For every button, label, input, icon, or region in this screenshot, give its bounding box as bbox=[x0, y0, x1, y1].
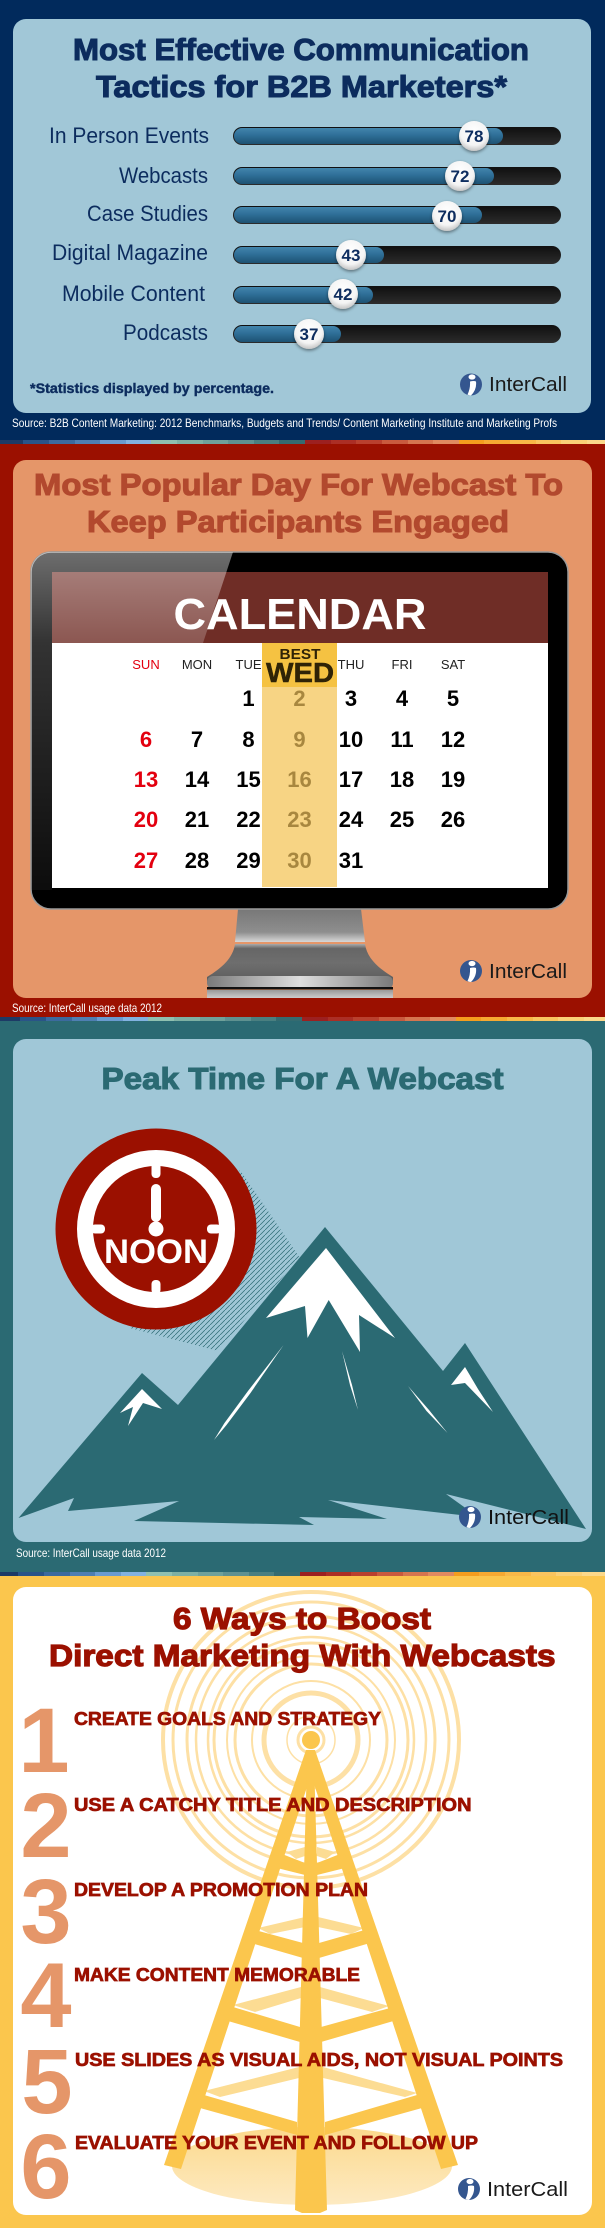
logo: intercall: InterCall bbox=[489, 374, 567, 396]
logo: intercall bbox=[460, 960, 567, 983]
best wednesday column: BEST bbox=[280, 646, 320, 663]
logo: intercall: InterCall bbox=[487, 2179, 568, 2201]
logo: intercall bbox=[460, 374, 567, 396]
calendar dates: 21 bbox=[185, 807, 209, 832]
tip 1: CREATE GOALS AND STRATEGY bbox=[74, 1709, 381, 1729]
row: podcasts 37: Podcasts bbox=[123, 320, 208, 345]
panel: most popular day bbox=[0, 444, 605, 1017]
calendar dates: 20 bbox=[134, 807, 158, 832]
tip 3 bbox=[20, 1861, 368, 1963]
calendar header bbox=[52, 572, 548, 643]
calendar dates: 1 bbox=[242, 686, 255, 711]
row: digital magazine 43 bbox=[52, 240, 561, 270]
row: webcasts 72 bbox=[119, 161, 561, 191]
list of six tips bbox=[18, 1690, 563, 2218]
calendar header: CALENDAR bbox=[174, 590, 426, 639]
row: in person events 78: 78 bbox=[465, 127, 483, 146]
calendar dates: 25 bbox=[390, 807, 414, 832]
heading: most effective communication tactics: Most Effective Communication bbox=[73, 32, 529, 67]
calendar dates: 29 bbox=[236, 848, 261, 873]
heading: most popular day for webcast: Keep Participants Engaged bbox=[87, 504, 509, 539]
calendar dates: 9 bbox=[293, 727, 306, 752]
calendar dates: 17 bbox=[339, 767, 363, 792]
tip 4: MAKE CONTENT MEMORABLE bbox=[74, 1965, 360, 1985]
row: case studies 70 bbox=[87, 201, 561, 231]
heading: most popular day for webcast: Most Popular Day For Webcast To bbox=[34, 467, 563, 502]
calendar dates: 15 bbox=[236, 767, 261, 792]
calendar dates: 19 bbox=[441, 767, 465, 792]
calendar dates: 6 bbox=[140, 727, 152, 752]
monitor stand bbox=[207, 909, 393, 998]
row: podcasts 37 bbox=[123, 319, 561, 349]
calendar dates: 5 bbox=[447, 686, 459, 711]
monitor with calendar bbox=[31, 552, 568, 909]
calendar dates: 13 bbox=[134, 767, 158, 792]
clock: noon bbox=[56, 1128, 256, 1330]
calendar dates: 18 bbox=[390, 767, 414, 792]
calendar dates: 28 bbox=[185, 848, 209, 873]
calendar dates: 24 bbox=[339, 807, 364, 832]
weekday labels: TUE bbox=[236, 657, 262, 672]
row: mobile content 42: 42 bbox=[334, 285, 352, 304]
source note: Source: InterCall usage data 2012 bbox=[12, 1001, 162, 1015]
logo: intercall: InterCall bbox=[489, 961, 567, 983]
heading: most effective communication tactics bbox=[73, 32, 529, 104]
logo: intercall bbox=[459, 1506, 569, 1529]
tip 3: 3 bbox=[20, 1861, 72, 1963]
calendar dates: 8 bbox=[242, 727, 255, 752]
tip 1: 1 bbox=[18, 1690, 70, 1792]
calendar dates: 27 bbox=[134, 848, 158, 873]
row: case studies 70: Case Studies bbox=[87, 201, 208, 226]
row: mobile content 42 bbox=[62, 279, 561, 309]
weekday labels: SAT bbox=[441, 657, 465, 672]
best wednesday column: WED bbox=[266, 657, 334, 688]
bar chart: tactic percentages bbox=[49, 121, 561, 349]
tip 2 bbox=[20, 1775, 472, 1877]
panel: peak time bbox=[0, 1021, 605, 1572]
tip 5: 5 bbox=[21, 2031, 73, 2133]
row: digital magazine 43: Digital Magazine bbox=[52, 240, 208, 265]
radio tower illustration bbox=[163, 1592, 459, 2213]
tip 4: 4 bbox=[20, 1945, 72, 2047]
row: podcasts 37: 37 bbox=[300, 325, 318, 344]
row: mobile content 42: Mobile Content bbox=[62, 281, 205, 306]
calendar dates: 11 bbox=[390, 727, 414, 752]
calendar dates: 7 bbox=[191, 727, 203, 752]
heading: most popular day for webcast bbox=[34, 467, 563, 539]
tip 2: 2 bbox=[20, 1775, 72, 1877]
calendar dates: 23 bbox=[287, 807, 312, 832]
footnote: *Statistics displayed by percentage. bbox=[30, 380, 274, 396]
tip 5 bbox=[21, 2031, 563, 2133]
tip 6: 6 bbox=[20, 2116, 72, 2218]
logo: intercall: InterCall bbox=[488, 1507, 569, 1529]
weekday labels: FRI bbox=[392, 657, 412, 672]
calendar dates: 14 bbox=[185, 767, 210, 792]
calendar dates: 4 bbox=[396, 686, 409, 711]
calendar dates bbox=[134, 686, 465, 873]
tip 4 bbox=[20, 1945, 360, 2047]
source note: Source: InterCall usage data 2012 bbox=[16, 1546, 166, 1560]
row: digital magazine 43: 43 bbox=[342, 246, 360, 265]
calendar dates: 16 bbox=[287, 767, 312, 792]
tip 6 bbox=[20, 2116, 478, 2218]
weekday labels: SUN bbox=[132, 657, 160, 672]
calendar dates: 2 bbox=[293, 686, 306, 711]
row: webcasts 72: Webcasts bbox=[119, 163, 208, 188]
row: case studies 70: 70 bbox=[438, 207, 456, 226]
tip 5: USE SLIDES AS VISUAL AIDS, NOT VISUAL POINTS bbox=[75, 2050, 563, 2070]
row: in person events 78: In Person Events bbox=[49, 123, 209, 148]
calendar dates: 31 bbox=[339, 848, 363, 873]
heading: most effective communication tactics: Tactics for B2B Marketers* bbox=[96, 69, 508, 104]
weekday labels: THU bbox=[338, 657, 364, 672]
calendar dates: 22 bbox=[236, 807, 261, 832]
row: in person events 78 bbox=[49, 121, 561, 151]
tip 2: USE A CATCHY TITLE AND DESCRIPTION bbox=[74, 1795, 472, 1815]
clock shadow hatching bbox=[130, 1170, 300, 1351]
heading: peak time for a webcast: Peak Time For A Webcast bbox=[102, 1061, 504, 1096]
tip 3: DEVELOP A PROMOTION PLAN bbox=[74, 1880, 368, 1900]
calendar dates: 26 bbox=[441, 807, 465, 832]
weekday labels: MON bbox=[182, 657, 212, 672]
logo: intercall bbox=[458, 2178, 568, 2201]
tip 6: EVALUATE YOUR EVENT AND FOLLOW UP bbox=[75, 2133, 478, 2153]
heading: six ways to boost direct marketing bbox=[49, 1601, 556, 1673]
weekday labels bbox=[132, 657, 465, 672]
tip 1 bbox=[18, 1690, 381, 1792]
row: webcasts 72: 72 bbox=[451, 167, 469, 186]
calendar dates: 12 bbox=[441, 727, 465, 752]
mountains bbox=[18, 1227, 586, 1529]
heading: six ways to boost direct marketing: Direct Marketing With Webcasts bbox=[49, 1638, 556, 1673]
best wednesday column bbox=[262, 643, 337, 887]
panel: six ways bbox=[0, 1576, 605, 2228]
calendar dates: 30 bbox=[287, 848, 312, 873]
calendar dates: 10 bbox=[339, 727, 363, 752]
clock: noon: NOON bbox=[104, 1233, 208, 1271]
heading: six ways to boost direct marketing: 6 Ways to Boost bbox=[173, 1601, 431, 1636]
calendar dates: 3 bbox=[345, 686, 357, 711]
panel: communication tactics bbox=[0, 0, 605, 440]
